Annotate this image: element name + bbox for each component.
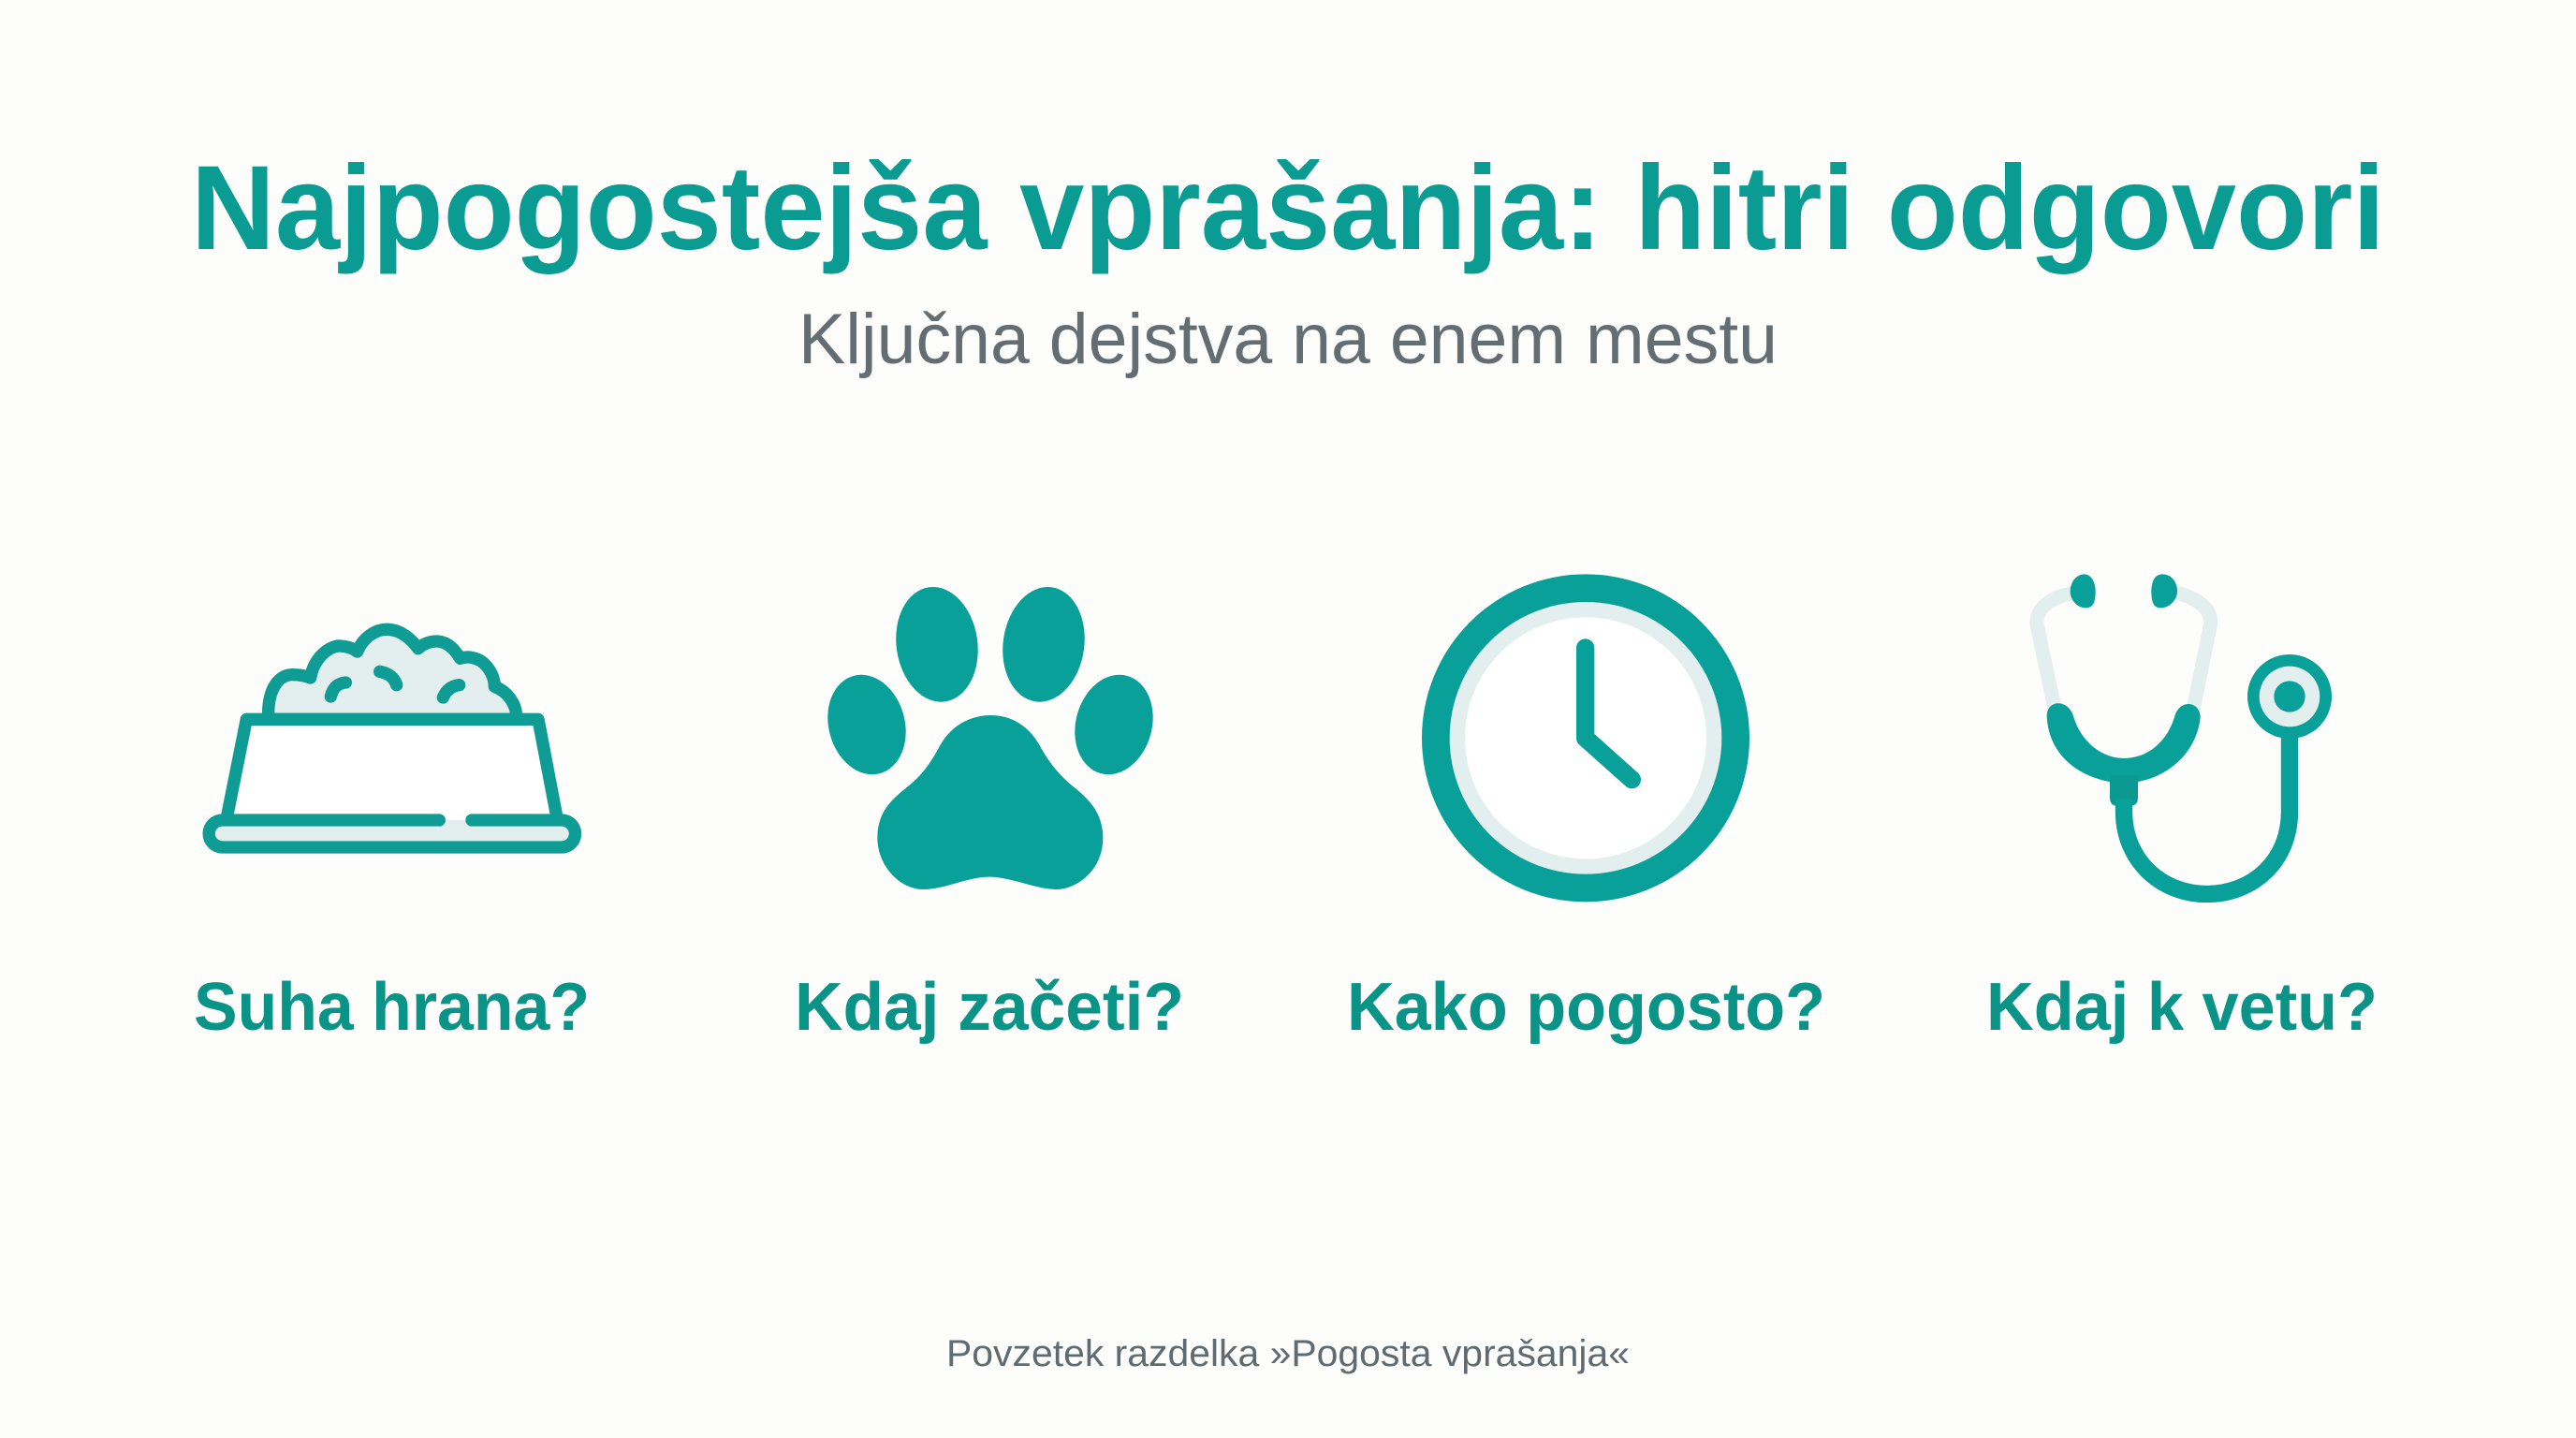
icon: stethoscope (2037, 574, 2332, 894)
subtitle: Ključna dejstva na enem mestu (798, 300, 1778, 379)
footer note: Povzetek razdelka »Pogosta vprašanja« (946, 1333, 1630, 1374)
bowl food pile (269, 629, 517, 719)
label: when to start: Kdaj začeti? (795, 970, 1184, 1045)
icon: clock (1422, 574, 1749, 902)
light tubes (2037, 592, 2211, 709)
title: Najpogostejša vprašanja: hitri odgovori (191, 141, 2385, 275)
kibble pieces (330, 671, 460, 697)
bowl base outline (209, 820, 575, 847)
label: when to vet: Kdaj k vetu? (1986, 970, 2378, 1045)
ear tips (2071, 574, 2177, 608)
clock face (1422, 574, 1749, 902)
bowl base (209, 820, 575, 847)
main pad (877, 715, 1103, 889)
clock hands (1586, 648, 1632, 780)
bowl body (227, 719, 557, 817)
tube (2124, 737, 2290, 894)
label: dry food: Suha hrana? (194, 970, 590, 1045)
label: how often: Kako pogosto? (1347, 970, 1825, 1045)
icon: paw (817, 581, 1164, 889)
chest piece (2247, 654, 2332, 739)
toe pads (817, 581, 1164, 784)
stem (2110, 775, 2138, 806)
headset yoke (2047, 703, 2201, 782)
icon: food bowl (209, 629, 575, 847)
